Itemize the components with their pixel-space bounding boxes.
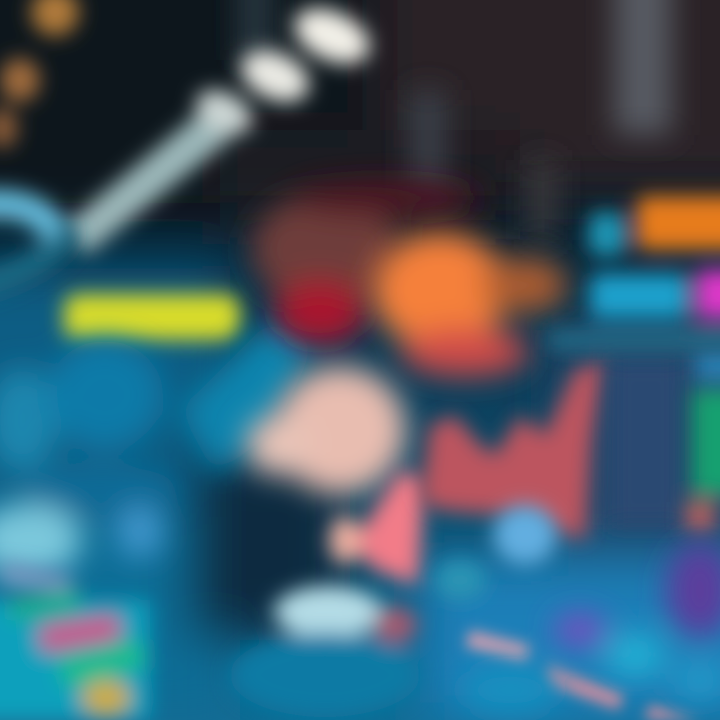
left blue shapes (0, 320, 315, 576)
bottom left colourful list (0, 564, 150, 720)
bottom right blobs (460, 542, 720, 714)
red bar chart (420, 360, 605, 540)
top right signs: orange and cyan (548, 196, 720, 350)
dark chart panel (610, 360, 682, 525)
figure: head and hair (251, 180, 480, 344)
shoe and lower figure (230, 505, 557, 717)
left blue swoosh (0, 204, 66, 285)
ceiling lights: orange dots (0, 0, 79, 148)
green chart bar (686, 350, 720, 530)
ceiling columns (240, 0, 672, 240)
bottom right diagonal strip (465, 630, 700, 720)
orange glow (372, 232, 567, 376)
pink legs (329, 470, 425, 585)
figure: pale body (246, 366, 406, 494)
diagonal light beam and lamps (62, 0, 378, 255)
yellow banner (64, 294, 240, 340)
